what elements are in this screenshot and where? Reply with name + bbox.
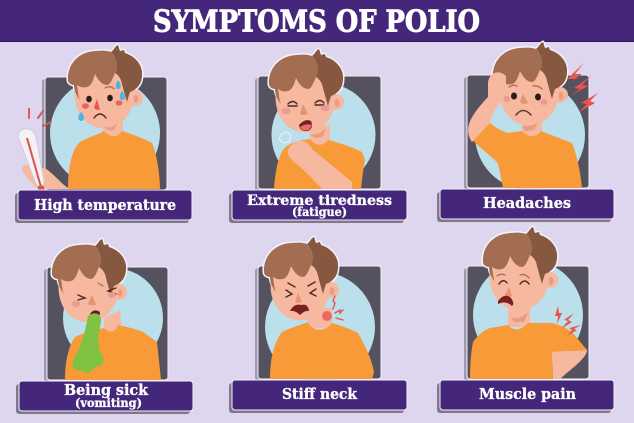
panel: stiff neck — [255, 237, 381, 382]
pain bolts — [566, 63, 598, 112]
blue circle — [272, 83, 376, 187]
label: extreme tiredness: (fatigue) — [292, 205, 347, 219]
label: stiff neck: Stiff neck — [282, 385, 358, 403]
label: muscle pain: Muscle pain — [479, 385, 576, 403]
title: SYMPTOMS OF POLIO — [153, 4, 480, 38]
dark backdrop — [47, 267, 168, 380]
panel: extreme tiredness — [255, 49, 381, 191]
boy body — [68, 118, 160, 189]
blue circle — [265, 272, 375, 382]
sweat drops — [78, 80, 125, 121]
panel: high temperature — [18, 45, 167, 192]
boy body — [470, 305, 587, 379]
boy body — [274, 125, 365, 189]
label: extreme tiredness: Extreme tiredness — [247, 193, 392, 209]
label: extreme tiredness — [229, 190, 407, 223]
label: being sick: (vomiting) — [75, 396, 142, 410]
blue circle — [63, 268, 163, 368]
boy head — [269, 49, 344, 138]
header band — [0, 0, 634, 42]
label: stiff neck — [229, 380, 407, 413]
raised arm and hand — [468, 72, 506, 142]
blue circle — [475, 80, 585, 190]
label: headaches — [437, 189, 614, 222]
dark backdrop — [258, 76, 381, 189]
boy head — [493, 42, 568, 131]
panel: muscle pain — [464, 227, 589, 381]
boy body — [270, 308, 374, 379]
vomit — [72, 313, 103, 373]
label: being sick — [16, 381, 193, 414]
boy head — [264, 237, 339, 320]
heat ticks — [29, 109, 51, 126]
boy head — [52, 239, 127, 322]
dark backdrop — [467, 266, 589, 379]
boy head — [68, 45, 143, 130]
label: muscle pain — [437, 380, 614, 413]
dark backdrop — [258, 266, 381, 379]
dark backdrop — [45, 77, 167, 190]
blue circle — [50, 78, 160, 188]
neck pain mark — [322, 296, 343, 321]
panel: being sick — [44, 239, 168, 382]
panel: headaches — [464, 42, 598, 190]
label: high temperature: High temperature — [34, 196, 176, 214]
boy body — [65, 310, 161, 380]
cough puff — [279, 132, 291, 143]
boy body — [472, 118, 582, 188]
label: being sick: Being sick — [64, 381, 149, 399]
boy head — [483, 227, 558, 322]
pain bolts — [555, 306, 581, 336]
dark backdrop — [467, 75, 589, 188]
label: high temperature — [15, 190, 192, 223]
label: headaches: Headaches — [483, 194, 571, 212]
blue circle — [473, 260, 583, 370]
hand and thermometer — [18, 129, 70, 190]
